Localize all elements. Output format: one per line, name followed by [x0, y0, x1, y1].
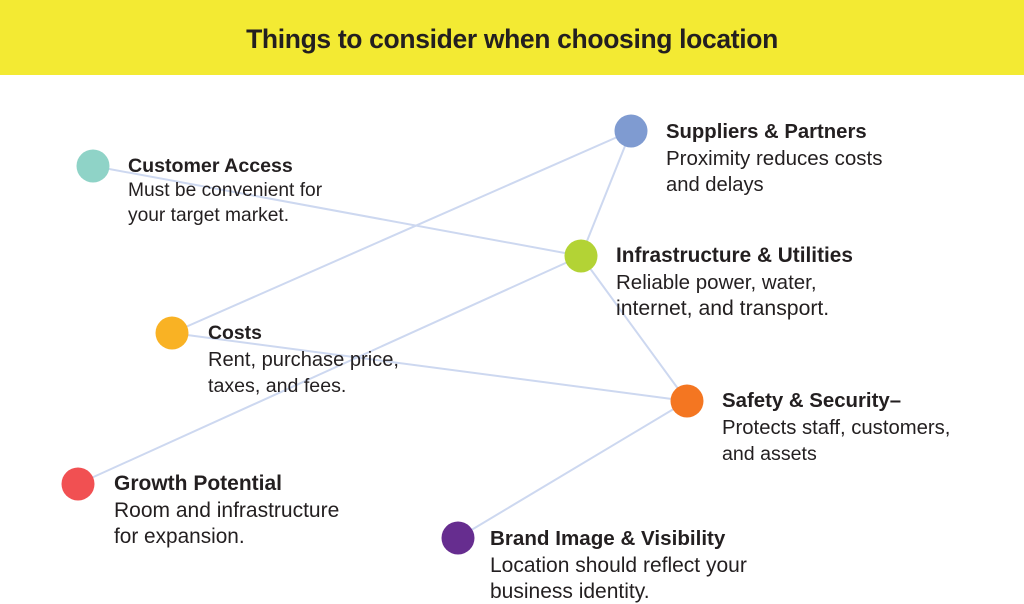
text: customer access: your target market. — [128, 205, 289, 226]
text: suppliers and partners: and delays — [666, 174, 764, 196]
text: growth potential: for expansion. — [114, 525, 245, 548]
text: brand image and visibility: business identity. — [490, 580, 650, 603]
node: safety and security — [670, 384, 704, 418]
text: infrastructure and utilities — [616, 244, 853, 320]
text: infrastructure and utilities: internet, and transport. — [616, 297, 829, 320]
text: growth potential — [114, 472, 339, 548]
node: infrastructure and utilities — [564, 240, 598, 272]
text: safety and security: and assets — [722, 443, 817, 465]
text: brand image and visibility — [490, 527, 747, 603]
text: suppliers and partners — [666, 121, 882, 196]
node: brand image and visibility — [442, 522, 474, 554]
text: infrastructure and utilities: Infrastructure & Utilities — [616, 244, 853, 267]
header banner — [0, 0, 1024, 75]
text: brand image and visibility: Location should reflect your — [490, 554, 747, 576]
text: customer access — [128, 155, 322, 226]
node: customer access — [76, 150, 110, 182]
title: Things to consider when choosing location — [246, 24, 778, 54]
node: costs — [156, 316, 188, 350]
text: suppliers and partners: Suppliers & Partners — [666, 121, 867, 143]
text: customer access: Customer Access — [128, 155, 293, 177]
text: costs — [208, 322, 399, 397]
text: growth potential: Growth Potential — [114, 472, 282, 495]
text: costs: taxes, and fees. — [208, 375, 346, 397]
text: safety and security: Safety & Security– — [722, 390, 901, 412]
node: growth potential — [62, 468, 94, 500]
node: suppliers and partners — [614, 114, 648, 148]
text: brand image and visibility: Brand Image & Visibility — [490, 527, 725, 550]
text: safety and security — [722, 390, 950, 465]
text: infrastructure and utilities: Reliable power, water, — [616, 270, 817, 294]
text: safety and security: Protects staff, customers, — [722, 416, 950, 438]
text: customer access: Must be convenient for — [128, 180, 322, 201]
text: suppliers and partners: Proximity reduces costs — [666, 146, 882, 170]
text: costs: Costs — [208, 322, 262, 344]
text: growth potential: Room and infrastructure — [114, 498, 339, 522]
text: costs: Rent, purchase price, — [208, 348, 399, 370]
